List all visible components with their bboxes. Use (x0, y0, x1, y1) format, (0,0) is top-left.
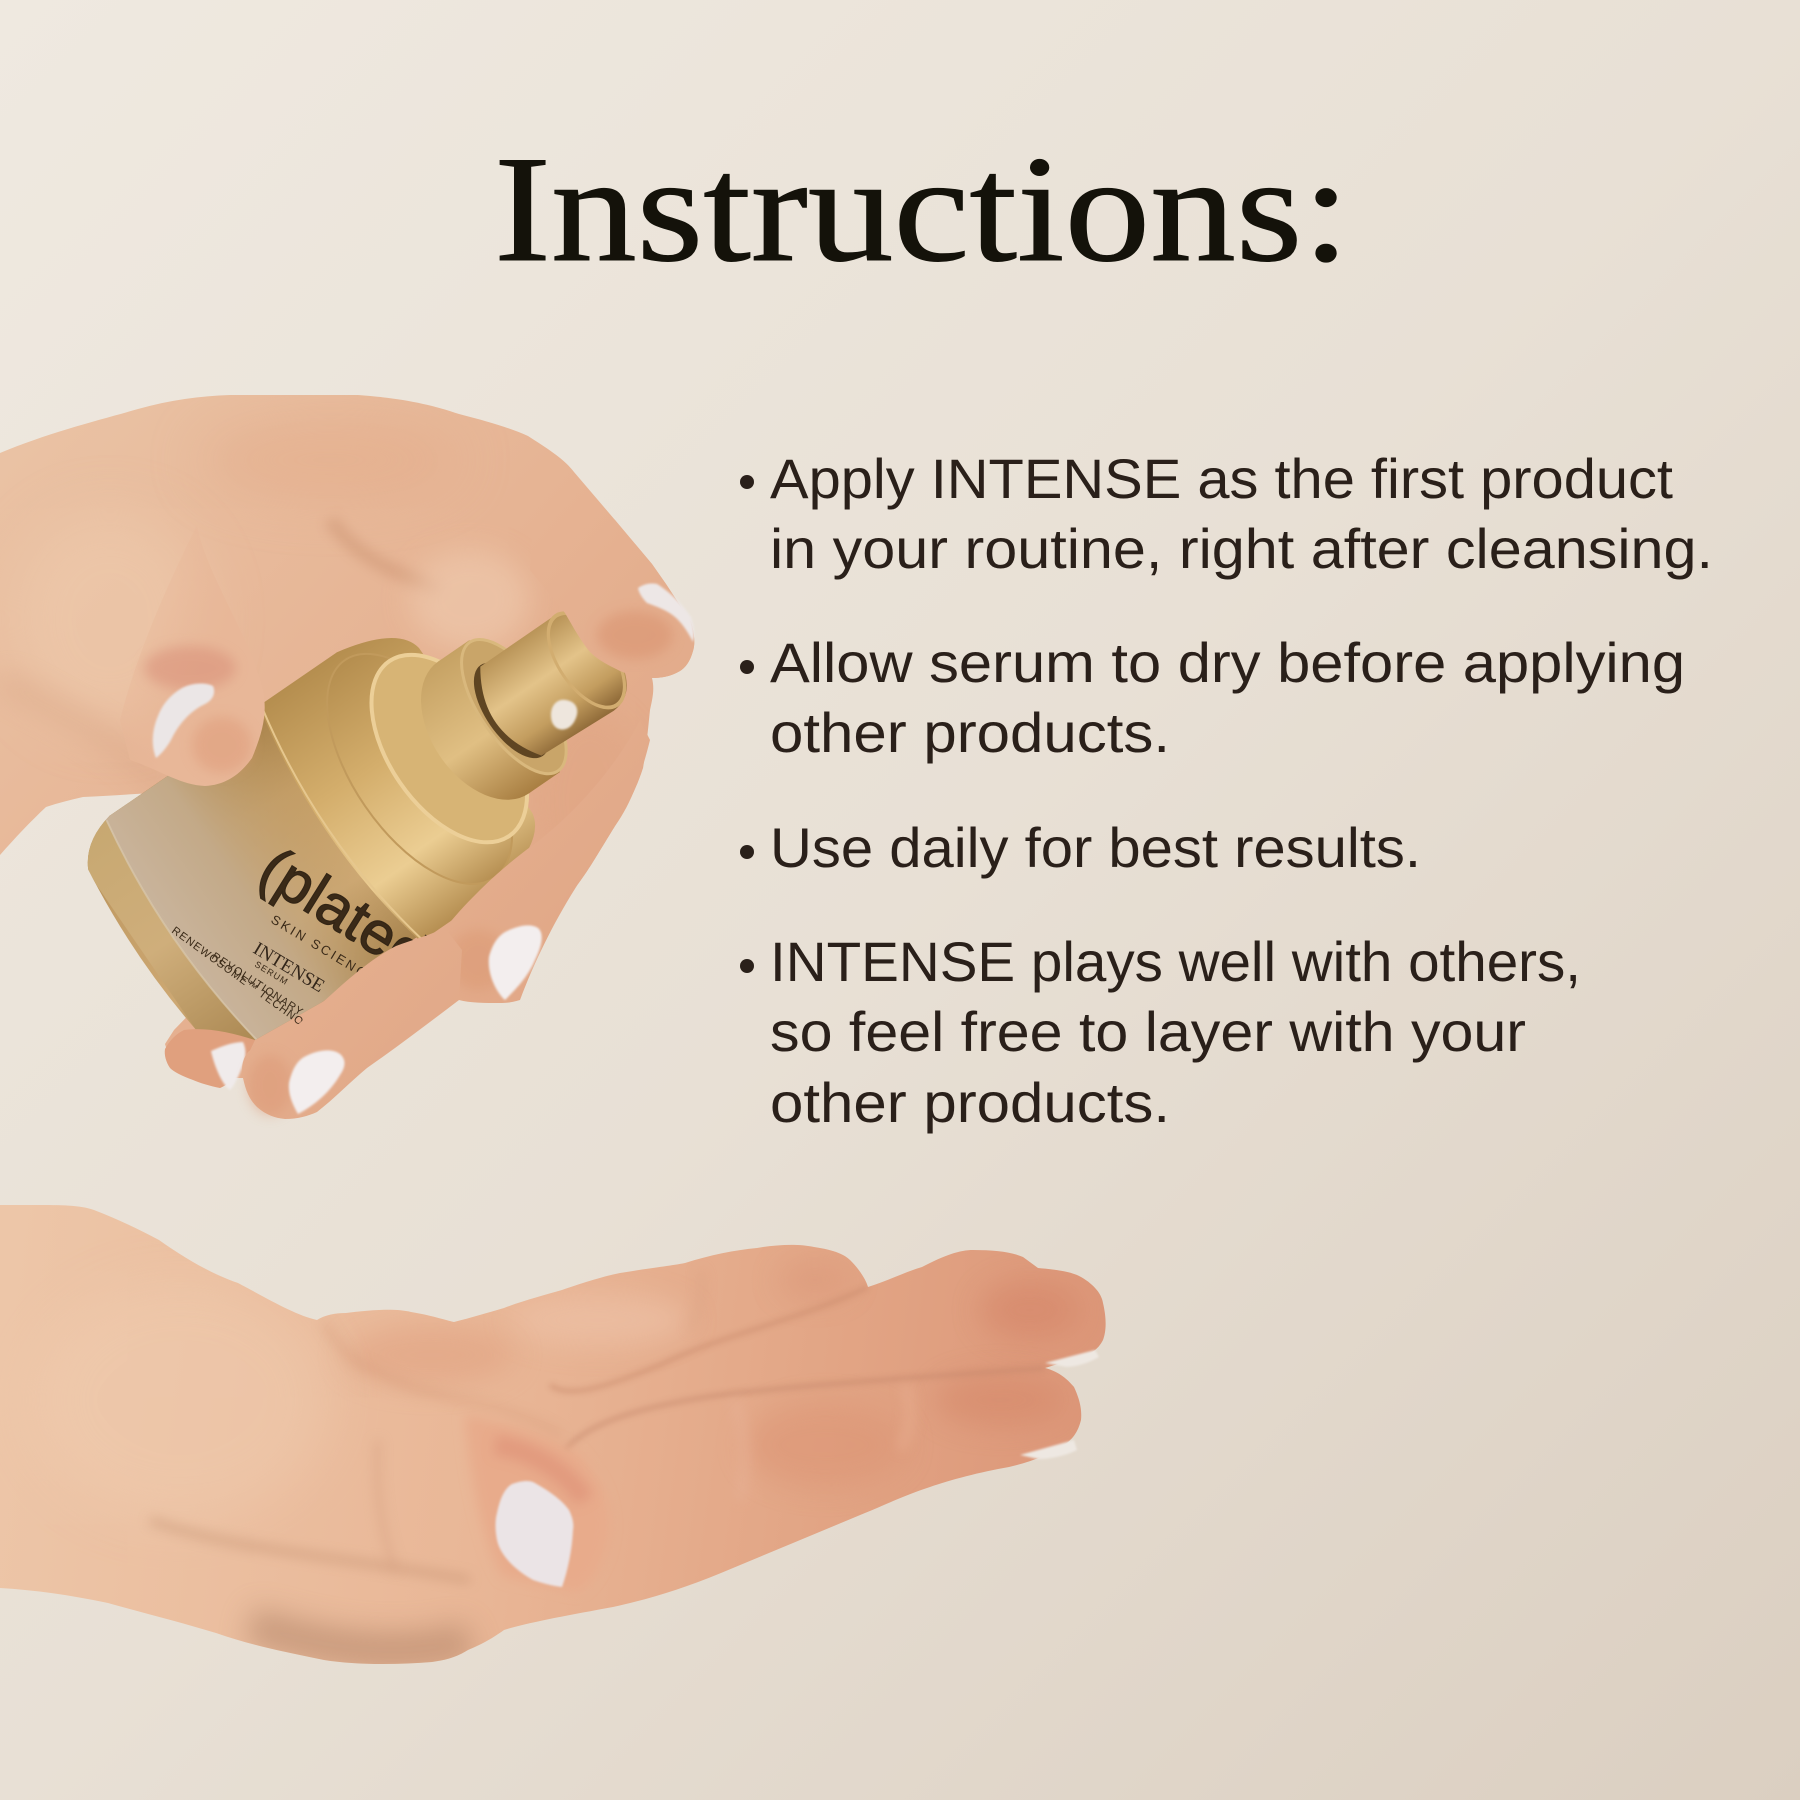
cap outer collar (246, 613, 557, 950)
nozzle drop (551, 700, 577, 730)
lower thumbnail (496, 1481, 573, 1587)
bullet 4 (740, 930, 1581, 1134)
instruction bullets (740, 447, 1713, 1134)
serum label: SERUM (253, 959, 290, 987)
middle nail (489, 925, 542, 1000)
middle finger (440, 720, 650, 1003)
thumb crease and base shadow (150, 1520, 470, 1580)
bullet 4: INTENSE plays well with others, (770, 930, 1581, 993)
neck (395, 632, 572, 823)
little finger (165, 1029, 255, 1090)
serum bottle (88, 612, 627, 1040)
thumb (120, 525, 265, 786)
skin science: SKIN SCIENCE (268, 912, 381, 987)
knuckle creases (735, 1400, 743, 1500)
pump actuator (465, 599, 643, 770)
bottle label text (169, 834, 439, 1049)
index fingertip on pump (530, 465, 694, 678)
finger tip flush (986, 1282, 1068, 1336)
middle finger nail sliver (1045, 1350, 1099, 1367)
bottle body (64, 683, 458, 1073)
frosted glass band (88, 770, 380, 1040)
hand: back and palm (0, 395, 694, 1078)
thumb tip shading (468, 1420, 552, 1574)
palm and fingers (0, 1190, 1120, 1680)
index nail (638, 583, 694, 642)
technology line 1: REVOLUTIONARY (209, 950, 306, 1019)
ring finger (242, 928, 462, 1119)
upper hand holding serum bottle (0, 380, 720, 1140)
product name: INTENSE (249, 938, 328, 997)
bullet 2 (740, 631, 1685, 764)
ring finger nail sliver (1020, 1440, 1077, 1459)
little nail (211, 1042, 245, 1090)
bullet 4: so feel free to layer with your (770, 1000, 1526, 1063)
cap step (340, 627, 559, 870)
bullet 2: Allow serum to dry before applying (770, 631, 1685, 694)
finger gaps (550, 1287, 868, 1391)
bullet 1 (740, 447, 1713, 580)
bullet 2: other products. (770, 701, 1170, 764)
bullet 4: other products. (770, 1071, 1170, 1134)
bullet 3: Use daily for best results. (770, 816, 1421, 879)
ring nail (289, 1050, 345, 1114)
lower open hand (0, 1190, 1120, 1680)
bullet 1: Apply INTENSE as the first product (770, 447, 1673, 510)
thumbnail with cream (153, 684, 214, 758)
technology line 2: RENEWOSOME™ TECHNOLOGY (169, 925, 334, 1049)
bullet 1: in your routine, right after cleansing. (770, 517, 1713, 580)
brand logo: (plated (248, 834, 439, 988)
title: Instructions: (494, 125, 1350, 293)
neck opening ring (442, 623, 586, 790)
